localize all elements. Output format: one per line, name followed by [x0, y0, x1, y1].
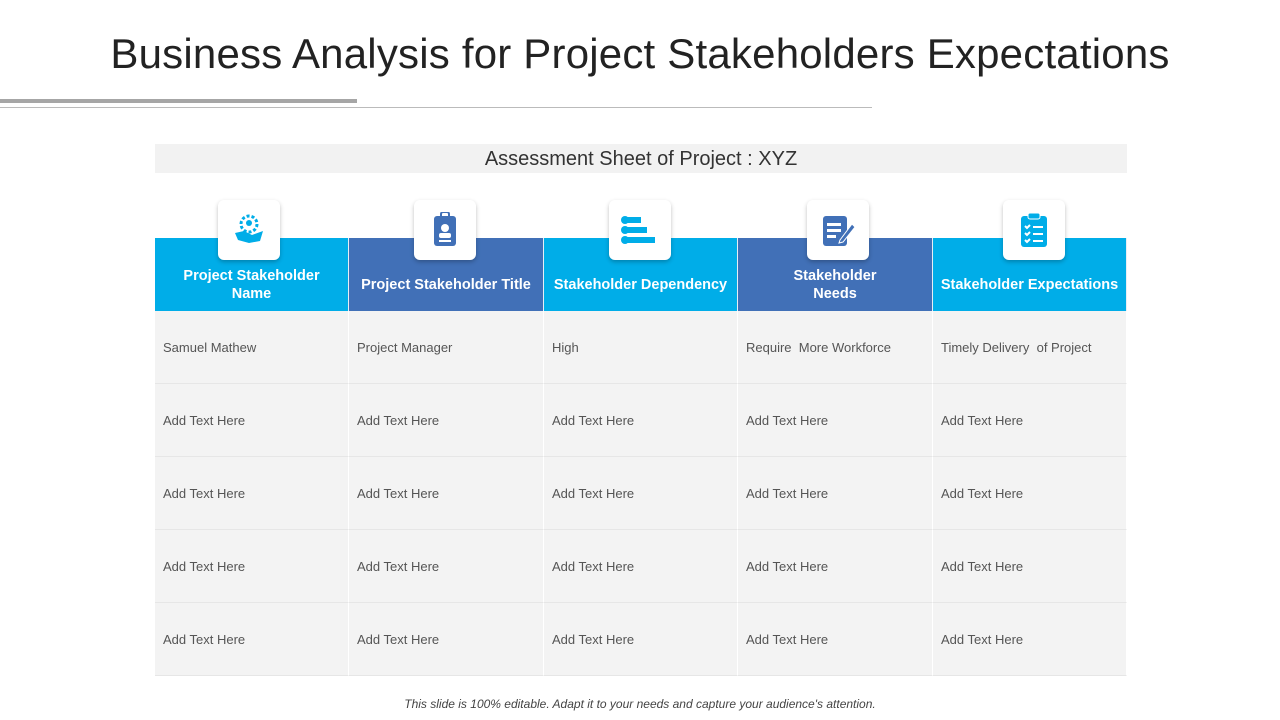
subtitle bar — [155, 144, 1127, 173]
header: dependency — [544, 238, 738, 311]
subtitle bar: Assessment Sheet of Project : XYZ — [485, 148, 797, 170]
icon: checklist clipboard — [1003, 200, 1065, 260]
table body: Add Text Here — [941, 486, 1023, 500]
table body: High — [552, 340, 579, 354]
header: title — [349, 238, 544, 311]
header: needs: Stakeholder — [794, 268, 876, 284]
header: needs: Needs — [813, 286, 857, 302]
header: name — [155, 238, 349, 311]
table body: Add Text Here — [746, 558, 828, 574]
table body: Add Text Here — [357, 486, 439, 500]
table body: Timely Delivery of Project — [941, 340, 1092, 354]
header: expectations — [933, 238, 1127, 311]
header: name: Name — [232, 286, 271, 302]
table body: Add Text Here — [163, 486, 245, 500]
title underline bars — [0, 99, 357, 103]
footer note: This slide is 100% editable. Adapt it to your needs and capture your audience's attention. — [404, 697, 876, 711]
title: Business Analysis for Project Stakeholders Expectations — [110, 30, 1170, 77]
header: needs — [738, 238, 933, 311]
table body: Add Text Here — [746, 632, 828, 646]
icon: id badge — [414, 200, 476, 260]
icon: handshake — [218, 200, 280, 260]
table body: Add Text Here — [552, 558, 634, 574]
table body: Add Text Here — [941, 632, 1023, 646]
table body: Add Text Here — [941, 412, 1023, 428]
table body: Project Manager — [357, 340, 452, 354]
table body: Add Text Here — [357, 558, 439, 574]
table body: Add Text Here — [163, 412, 245, 428]
table body: Add Text Here — [746, 486, 828, 500]
header row — [155, 238, 1127, 311]
table body: Add Text Here — [357, 412, 439, 428]
table body: Add Text Here — [552, 632, 634, 646]
table body: Add Text Here — [746, 412, 828, 428]
icon: notepad pen — [807, 200, 869, 260]
table body: Add Text Here — [552, 486, 634, 500]
table body: Samuel Mathew — [163, 340, 256, 354]
table body: Add Text Here — [163, 632, 245, 646]
icon: numbered list — [609, 200, 671, 260]
table body: Add Text Here — [552, 412, 634, 428]
table body — [155, 311, 1127, 676]
table body: Require More Workforce — [746, 340, 891, 354]
header: dependency: Stakeholder Dependency — [554, 277, 727, 293]
table body: Add Text Here — [163, 558, 245, 574]
header: name: Project Stakeholder — [183, 268, 320, 284]
table body: Add Text Here — [941, 558, 1023, 574]
header: title: Project Stakeholder Title — [361, 277, 531, 293]
header: expectations: Stakeholder Expectations — [941, 277, 1118, 293]
table body: Add Text Here — [357, 632, 439, 646]
